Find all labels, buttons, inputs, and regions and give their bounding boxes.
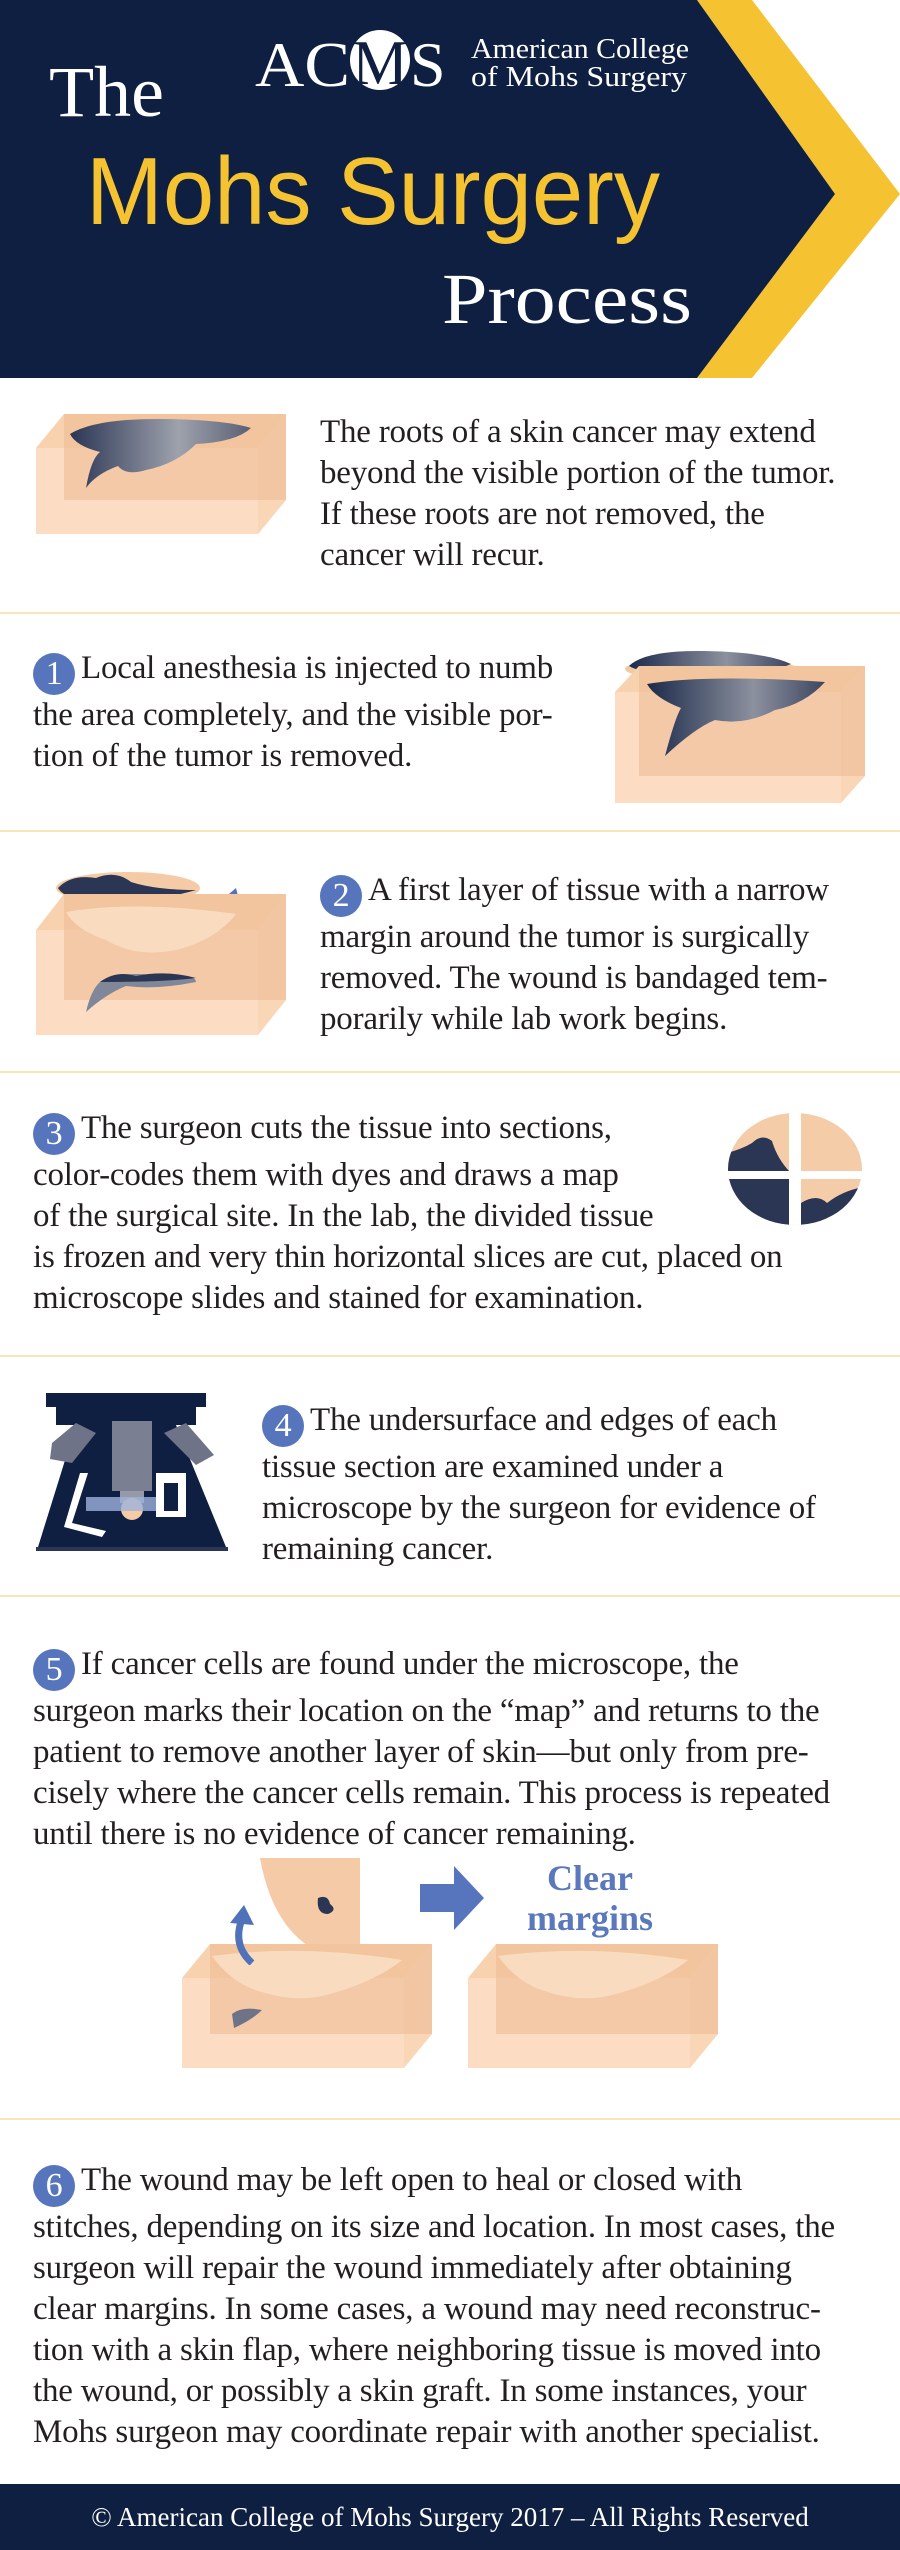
step 6 text: 6 — [46, 2167, 62, 2204]
step 1 text: Local anesthesia is injected to numb — [81, 650, 553, 686]
step 3 text: 3 — [46, 1115, 62, 1152]
step 3 text: of the surgical site. In the lab, the divided tissue — [33, 1198, 653, 1234]
step 3 illustration: sectioned tissue map — [728, 1113, 862, 1225]
step 4 text: The undersurface and edges of each — [310, 1402, 777, 1438]
step 1 text: the area completely, and the visible por- — [33, 697, 553, 733]
step 1 text — [33, 650, 553, 774]
logo: S — [410, 29, 446, 100]
step 2 text: A first layer of tissue with a narrow — [368, 872, 829, 908]
step 2 illustration — [36, 872, 286, 1035]
step 5 text: If cancer cells are found under the microscope, the — [81, 1646, 739, 1682]
step 4 text: microscope by the surgeon for evidence of — [262, 1490, 816, 1526]
step 4 illustration: microscope — [36, 1393, 228, 1551]
step 4 text — [262, 1402, 816, 1567]
arrow to clear margins — [420, 1866, 484, 1930]
logo: AC — [255, 29, 350, 100]
logo — [255, 27, 689, 100]
step 6 text: the wound, or possibly a skin graft. In some instances, your — [33, 2373, 806, 2409]
intro text: beyond the visible portion of the tumor. — [320, 455, 835, 491]
clear margins label — [527, 1858, 653, 1938]
step 1 text: tion of the tumor is removed. — [33, 738, 412, 774]
clear margins label: Clear — [547, 1858, 633, 1898]
curved arrow — [230, 1905, 254, 1965]
step 5 text: cisely where the cancer cells remain. This process is repeated — [33, 1775, 830, 1811]
step 2 text: removed. The wound is bandaged tem- — [320, 960, 827, 996]
title: Process — [442, 259, 692, 339]
step 2 text — [320, 872, 829, 1037]
footer — [0, 2484, 900, 2550]
step 4 text: remaining cancer. — [262, 1531, 493, 1567]
step 6 text: clear margins. In some cases, a wound may need reconstruc- — [33, 2291, 821, 2327]
step 1 text: 1 — [46, 655, 62, 692]
step 3 text: color-codes them with dyes and draws a map — [33, 1157, 619, 1193]
step 2 text: margin around the tumor is surgically — [320, 919, 809, 955]
title: The — [49, 52, 164, 132]
step 3 text: The surgeon cuts the tissue into sections, — [81, 1110, 612, 1146]
title — [49, 52, 692, 339]
step 5 text: patient to remove another layer of skin—but only from pre- — [33, 1734, 809, 1770]
step 3 text: is frozen and very thin horizontal slices are cut, placed on — [33, 1239, 782, 1275]
step 5 text: 5 — [46, 1651, 62, 1688]
step 5 quarter tissue section — [260, 1858, 360, 1944]
step 6 text: tion with a skin flap, where neighboring tissue is moved into — [33, 2332, 821, 2368]
step 2 text: porarily while lab work begins. — [320, 1001, 727, 1037]
clear margins label: margins — [527, 1898, 653, 1938]
intro illustration: skin block with tumor roots — [36, 414, 286, 534]
step 4 text: 4 — [275, 1407, 291, 1444]
step 6 text: The wound may be left open to heal or closed with — [81, 2162, 742, 2198]
intro text: cancer will recur. — [320, 537, 545, 573]
step 3 text: microscope slides and stained for examination. — [33, 1280, 643, 1316]
title: Mohs Surgery — [86, 138, 660, 245]
step 5 text: until there is no evidence of cancer remaining. — [33, 1816, 636, 1852]
step 6 text: surgeon will repair the wound immediately after obtaining — [33, 2250, 792, 2286]
step 2 text: 2 — [333, 877, 349, 914]
logo: M — [352, 27, 408, 98]
step 5 block: another layer — [182, 1944, 432, 2068]
step 6 text: Mohs surgeon may coordinate repair with another specialist. — [33, 2414, 820, 2450]
step 3 text — [33, 1110, 782, 1316]
header banner — [0, 0, 900, 378]
step 4 text: tissue section are examined under a — [262, 1449, 723, 1485]
step 6 text — [33, 2162, 835, 2450]
logo: American College — [471, 34, 689, 65]
step 1 illustration — [615, 651, 865, 803]
logo: of Mohs Surgery — [471, 62, 687, 93]
step 5 text — [33, 1646, 830, 1852]
step 5 block: clear — [468, 1944, 718, 2068]
footer: © American College of Mohs Surgery 2017 – All Rights Reserved — [91, 2502, 809, 2532]
intro text — [320, 414, 835, 573]
intro text: If these roots are not removed, the — [320, 496, 765, 532]
step 5 text: surgeon marks their location on the “map” and returns to the — [33, 1693, 820, 1729]
intro text: The roots of a skin cancer may extend — [320, 414, 816, 450]
step 6 text: stitches, depending on its size and location. In most cases, the — [33, 2209, 835, 2245]
